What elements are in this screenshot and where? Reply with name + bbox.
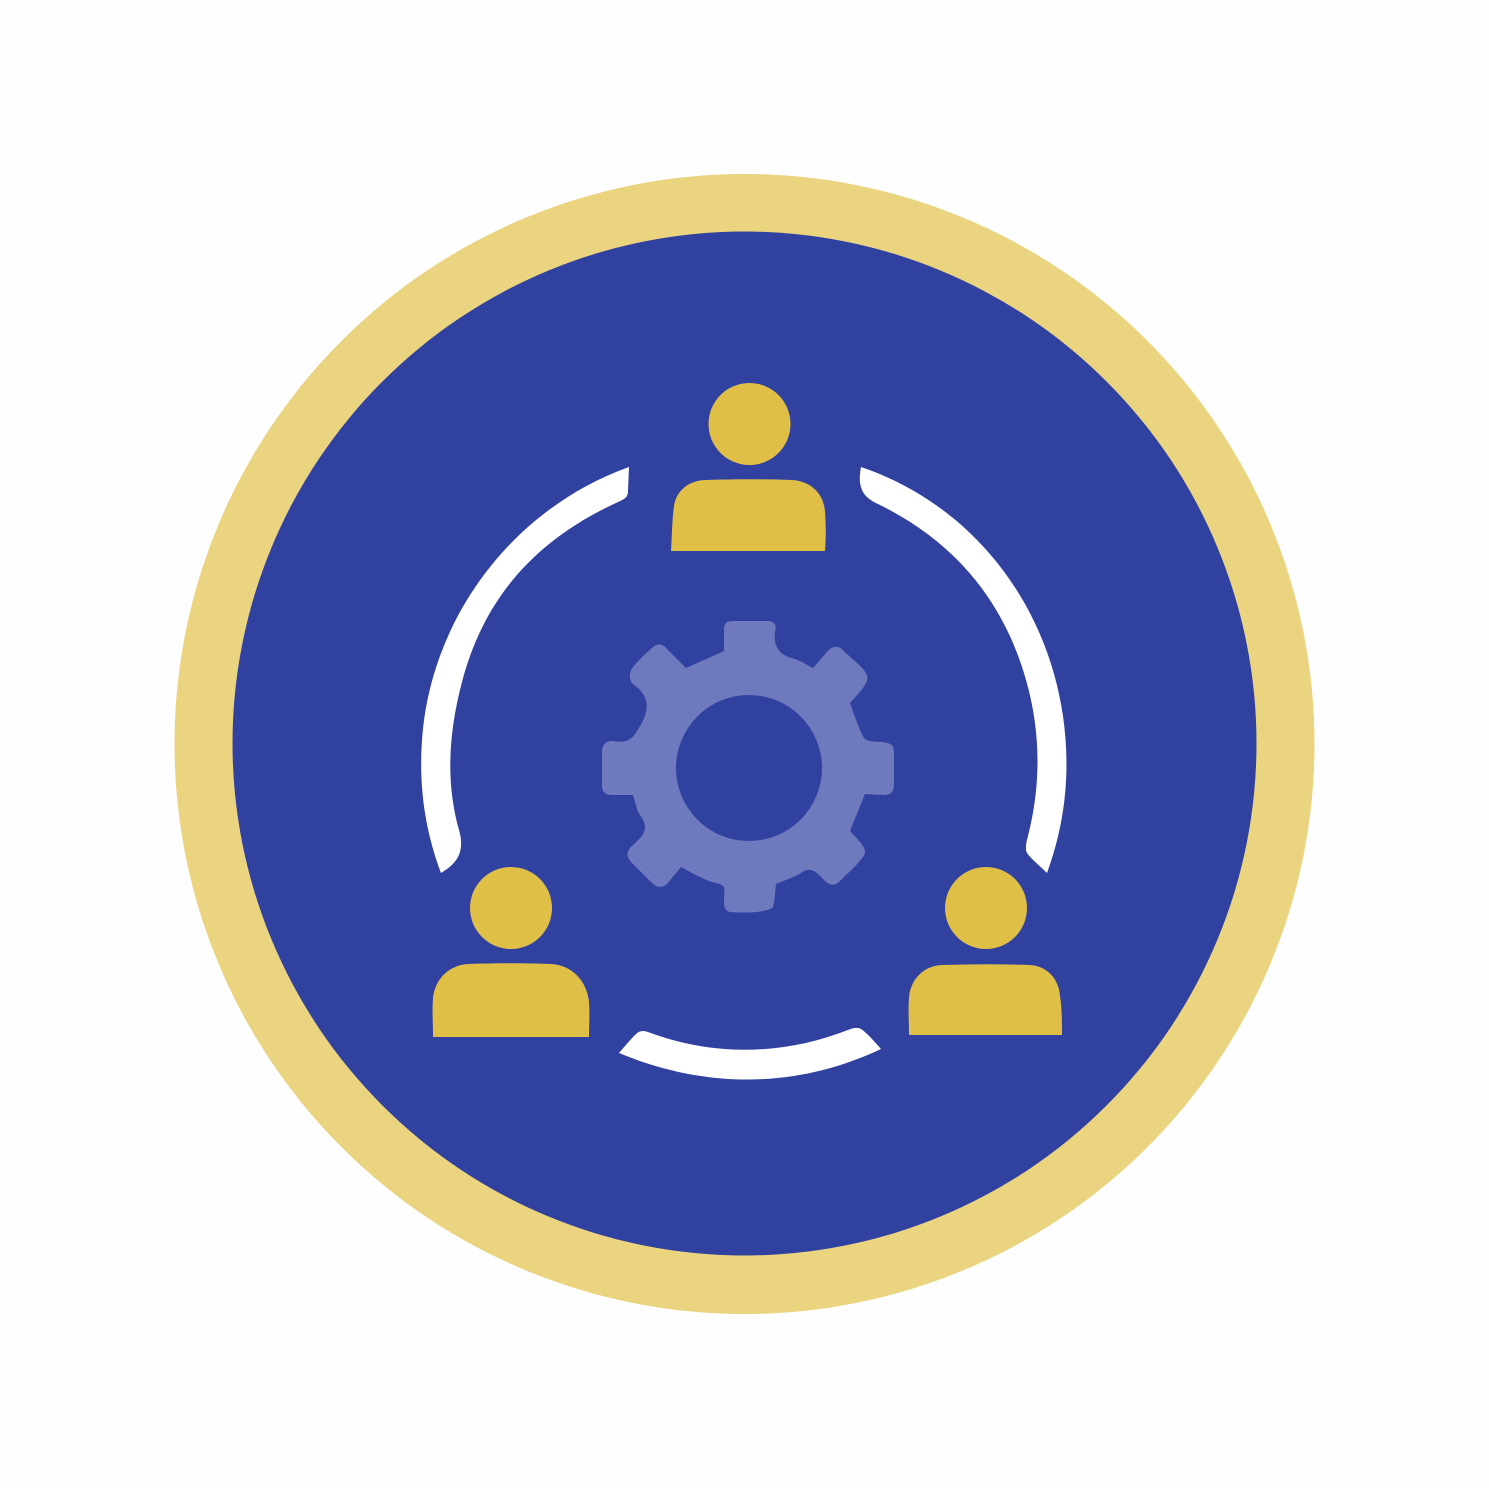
gear body: [602, 621, 894, 912]
person: bottom left: [433, 867, 589, 1037]
outer gold ring: [174, 174, 1314, 1314]
person: top: [671, 383, 826, 551]
gear: [602, 621, 894, 912]
arc: upper right: [860, 467, 1066, 873]
blue disc: [232, 232, 1256, 1256]
arc: upper left: [421, 467, 629, 873]
arc: bottom: [619, 1028, 881, 1080]
person: bottom right: [909, 867, 1062, 1035]
